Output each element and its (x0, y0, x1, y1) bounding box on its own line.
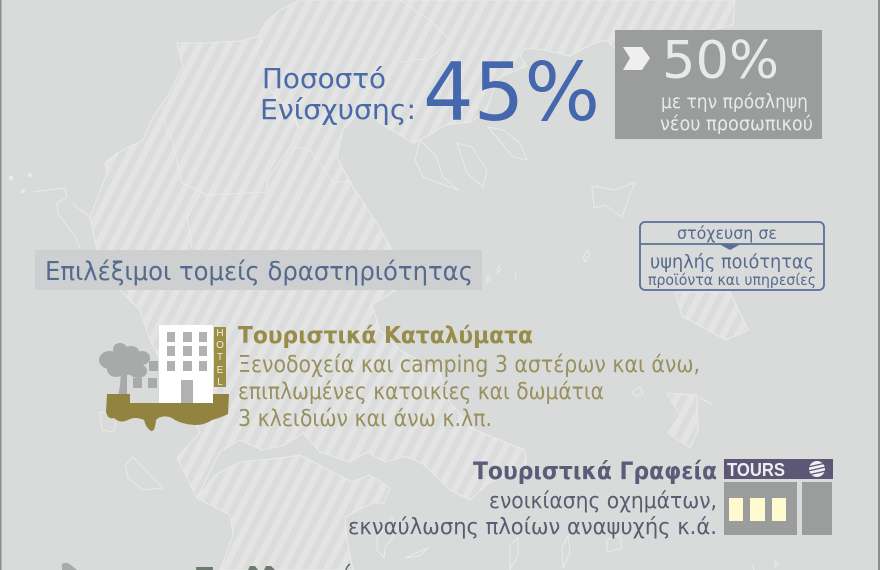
hotel sign: E (217, 365, 224, 376)
callout: high quality targeting: προϊόντα και υπηρεσίες (648, 271, 816, 289)
panel: 50 percent with new hires (615, 30, 822, 139)
text block: tourist accommodation (238, 321, 700, 432)
text block: travel agencies: ενοικίασης οχημάτων, (489, 489, 717, 514)
label: subsidy rate: Ενίσχυσης: (260, 93, 416, 126)
icon: hotel (99, 325, 229, 431)
icon: chevron (623, 47, 650, 70)
text block: tourist accommodation: 3 κλειδιών και άνω κ.λπ. (238, 406, 492, 432)
text block: travel agencies: Τουριστικά Γραφεία (473, 457, 717, 485)
text block: travel agencies: εκναύλωσης πλοίων αναψυχής κ.ά. (348, 515, 717, 540)
cropped next section at bottom edge (62, 562, 350, 570)
hotel sign: H (216, 328, 224, 339)
figure: 50 percent: 50% (662, 31, 779, 91)
text block: tourist accommodation: επιπλωμένες κατοικίες και δωμάτια (238, 379, 604, 405)
heading: eligible activity sectors: Επιλέξιμοι τομείς δραστηριότητας (45, 257, 473, 287)
icon: notch arrow (719, 244, 741, 250)
callout: high quality targeting: υψηλής ποιότητας (650, 251, 814, 273)
note: new staff hiring: με την πρόσληψη (661, 90, 808, 113)
callout: high quality targeting: στόχευση σε (677, 224, 777, 244)
globe (808, 461, 826, 477)
callout: high quality targeting (640, 222, 824, 290)
figure: 45 percent: 45% (423, 46, 600, 139)
text block: travel agencies (348, 457, 717, 540)
hotel sign: L (217, 377, 223, 388)
note: new staff hiring (660, 90, 813, 135)
label: subsidy rate: Ποσοστό (262, 62, 386, 95)
text block: tourist accommodation: Ξενοδοχεία και camping 3 αστέρων και άνω, (238, 352, 700, 378)
tree (99, 343, 150, 403)
hotel sign: T (217, 352, 223, 363)
icon: tours shop (724, 459, 833, 535)
hotel sign: O (216, 340, 224, 351)
main building (159, 325, 213, 403)
text block: tourist accommodation: Τουριστικά Καταλύματα (238, 321, 533, 349)
headline: subsidy rate (260, 46, 600, 139)
back building windows (133, 361, 158, 388)
ground (106, 394, 229, 431)
hotel sign (214, 327, 226, 388)
label: subsidy rate (260, 62, 416, 126)
icon: tours shop: TOURS (727, 460, 785, 480)
note: new staff hiring: νέου προσωπικού (660, 112, 813, 135)
